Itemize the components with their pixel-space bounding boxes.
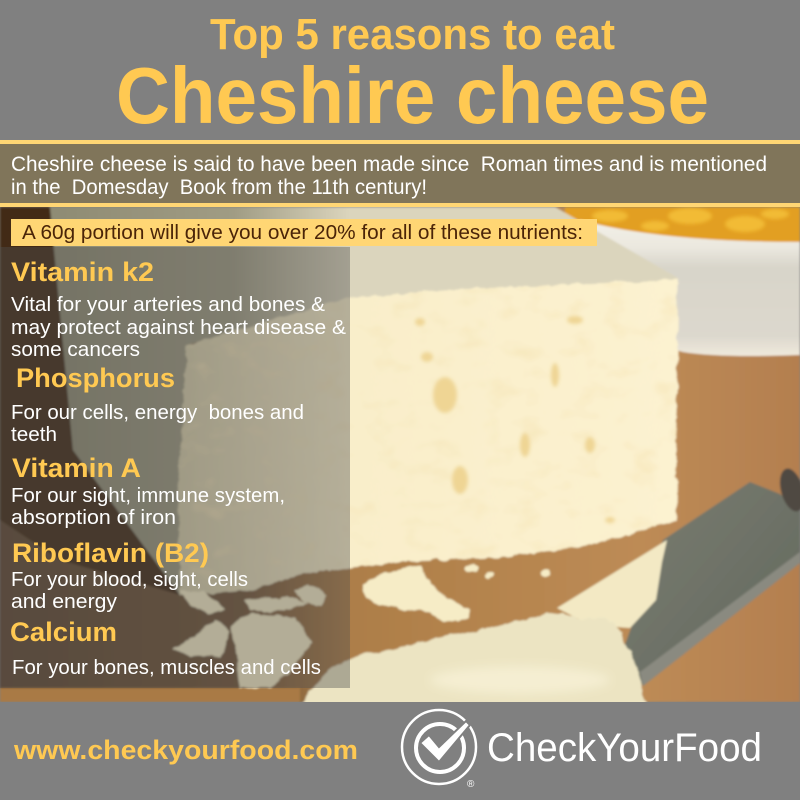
text: Phosphorus description [11,401,304,446]
cheese crumble texture [212,299,675,555]
knife serrated edge [640,552,800,686]
callout: 60g portion: A 60g portion will give you over 20% for all of these nutrients: [22,221,583,244]
heading: Phosphorus: Phosphorus [16,363,175,393]
text: Phosphorus description: teeth [11,423,57,446]
band fill [0,144,800,203]
heading: Vitamin A: Vitamin A [12,453,141,483]
text: Riboflavin description [11,568,248,613]
text: Vitamin A description [11,484,285,529]
panel: nutrient list [0,247,350,688]
cheese slice in foreground [280,613,650,730]
wordmark: CheckYourFood [487,726,762,770]
white bowl [570,220,800,356]
text: Vitamin A description: For our sight, immune system, [11,484,285,507]
text: Vitamin A description: absorption of iron [11,506,176,529]
text: Calcium description: For your bones, muscles and cells [12,656,321,679]
wooden board [0,207,800,702]
heading: Vitamin k2: Vitamin k2 [11,257,154,287]
band top rule [0,140,800,144]
cheese crumbs [174,564,550,688]
title line 2: Cheshire cheese [116,51,709,140]
cheese front face [178,278,678,595]
text: Vitamin k2 description: may protect against heart disease & [11,316,346,339]
dark background corner [0,207,180,595]
intro band [0,140,800,207]
panel background [0,247,350,688]
logo: CheckYourFood [402,710,762,790]
text: Vitamin k2 description [11,293,346,361]
knife handle [776,466,800,514]
footer band [0,702,800,800]
cheese smear on knife [557,540,667,628]
text: Phosphorus description: For our cells, energy bones and [11,401,304,424]
top header band [0,0,800,140]
website url: www.checkyourfood.com [13,735,358,765]
text: Vitamin k2 description: some cancers [11,338,140,361]
heading: Calcium: Calcium [10,617,117,647]
title line 1: Top 5 reasons to eat [210,10,615,59]
board strip below panel [0,688,300,702]
cheese hollows [415,316,615,523]
heading: Riboflavin (B2): Riboflavin (B2) [12,538,209,568]
intro text [11,153,767,199]
text: Riboflavin description: For your blood, sight, cells [11,568,248,591]
icon: check mark in circles [402,710,476,784]
intro text: Cheshire cheese is said to have been made since Roman times and is mentioned [11,153,767,176]
photo: cheese on a wooden board [0,207,800,730]
intro text: in the Domesday Book from the 11th century! [11,176,427,199]
cheese top face [50,207,678,595]
title [116,10,709,140]
knife blade [623,482,800,686]
text: Riboflavin description: and energy [11,590,118,613]
text: Vitamin k2 description: Vital for your arteries and bones & [11,293,325,316]
chutney in bowl [565,207,800,252]
band bottom rule [0,203,800,207]
registered mark: ® [467,779,475,790]
